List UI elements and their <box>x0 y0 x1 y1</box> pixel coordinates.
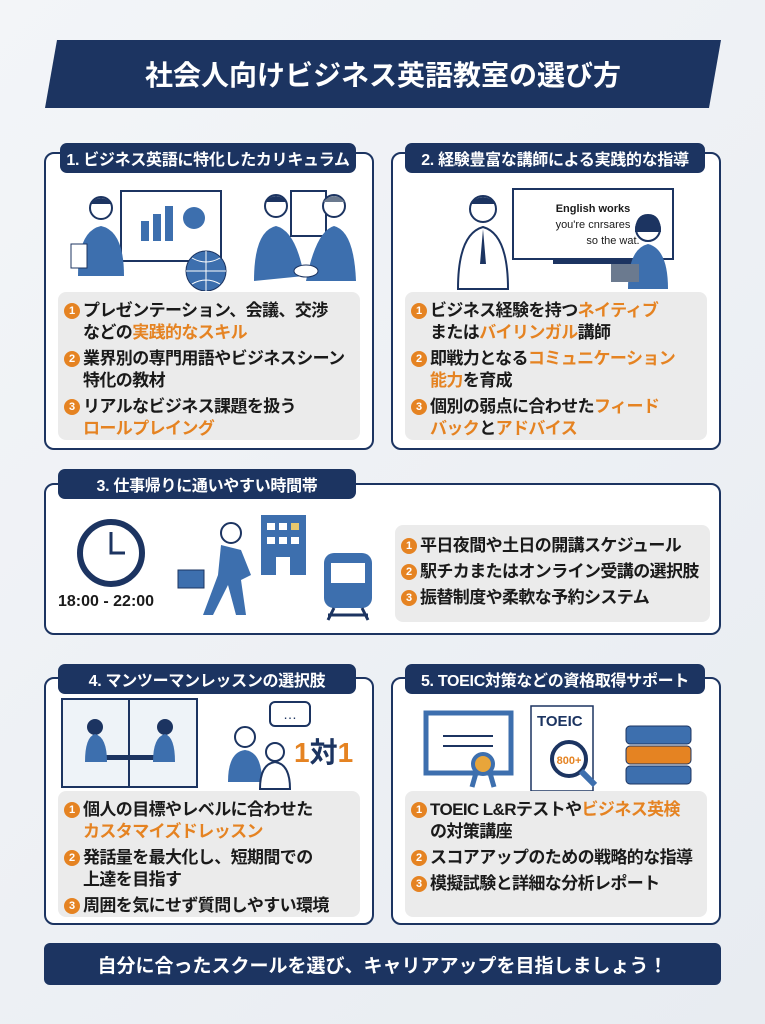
panel 1 list: 業界別の専門用語やビジネスシーン <box>83 349 345 368</box>
panel 4 list <box>58 791 360 917</box>
panel 2 <box>391 152 721 450</box>
panel 3 list: 1 <box>406 540 412 552</box>
panel 2 list: 3 <box>416 401 422 413</box>
panel 1 list: 1 <box>69 305 75 317</box>
panel 3 list: 駅チカまたはオンライン受講の選択肢 <box>420 562 699 581</box>
panel 5 illustrations <box>424 705 692 791</box>
panel 2 list: 即戦力となるコミュニケーション <box>430 349 675 368</box>
panel 3 list: 3 <box>406 592 412 604</box>
panel 2 list: 1 <box>416 305 422 317</box>
panel 2 illustrations: so the wat. <box>586 235 640 247</box>
tab 2: 2. 経験豊富な講師による実践的な指導 <box>421 152 689 169</box>
panel 4 list: 周囲を気にせず質問しやすい環境 <box>83 896 329 915</box>
tab 4: 4. マンツーマンレッスンの選択肢 <box>89 673 325 690</box>
tab 2 <box>405 143 705 173</box>
panel 1 illustrations <box>70 190 356 291</box>
panel 4 list: 発話量を最大化し、短期間での <box>83 848 313 867</box>
panel 4 <box>44 677 374 925</box>
panel 2 list: バックとアドバイス <box>430 419 577 438</box>
icon: runner, building, train <box>178 515 372 621</box>
footer banner: 自分に合ったスクールを選び、キャリアアップを目指しましょう！ <box>97 956 668 976</box>
panel 2 list: 個別の弱点に合わせたフィード <box>430 397 659 416</box>
panel 2 list: ビジネス経験を持つネイティブ <box>430 301 658 320</box>
tab 5 <box>405 664 705 694</box>
panel 4 list: 上達を目指す <box>83 870 181 889</box>
tab 1: 1. ビジネス英語に特化したカリキュラム <box>66 152 350 169</box>
panel 1 list: などの実践的なスキル <box>83 323 247 342</box>
icon: clock <box>77 519 145 587</box>
panel 5 list: の対策講座 <box>430 822 512 841</box>
panel 5 list <box>405 791 707 917</box>
time label: 18:00 - 22:00 <box>58 593 154 610</box>
tab 5: 5. TOEIC対策などの資格取得サポート <box>421 673 689 690</box>
panel 5 list: スコアアップのための戦略的な指導 <box>430 848 692 867</box>
title banner: 社会人向けビジネス英語教室の選び方 <box>145 60 621 91</box>
panel 4 list: 2 <box>69 852 75 864</box>
panel 5 list: 3 <box>416 878 422 890</box>
panel 4 list: カスタマイズドレッスン <box>83 822 263 841</box>
panel 1 list: ロールプレイング <box>83 419 214 438</box>
panel 5 list: 2 <box>416 852 422 864</box>
footer banner <box>44 943 721 985</box>
label: 1対1: 1対1 <box>294 737 353 768</box>
panel 5 illustrations: TOEIC <box>537 713 583 730</box>
panel 2 list <box>405 292 707 440</box>
panel 5 illustrations: 800+ <box>557 755 581 767</box>
panel 1 list <box>58 292 360 440</box>
tab 4 <box>58 664 356 694</box>
panel 1 list: リアルなビジネス課題を扱う <box>83 397 296 416</box>
panel 3 list: 振替制度や柔軟な予約システム <box>420 588 649 607</box>
panel 5 list: 模擬試験と詳細な分析レポート <box>430 874 660 893</box>
panel 2 list: 2 <box>416 353 422 365</box>
panel 1 list: 特化の教材 <box>83 371 165 390</box>
panel 1 list: 2 <box>69 353 75 365</box>
tab 1 <box>60 143 356 173</box>
panel 2 list: 能力を育成 <box>430 371 512 390</box>
tab 3: 3. 仕事帰りに通いやすい時間帯 <box>96 478 318 495</box>
panel 3 list: 2 <box>406 566 412 578</box>
panel 4 list: 1 <box>69 804 75 816</box>
tab 3 <box>58 469 356 499</box>
panel 5 list: 1 <box>416 804 422 816</box>
panel 1 list: プレゼンテーション、会議、交渉 <box>83 301 328 320</box>
panel 2 illustrations: you're cnrsares <box>556 219 631 231</box>
panel 5 <box>391 677 721 925</box>
panel 4 illustrations: … <box>283 706 297 722</box>
panel 3 list <box>395 525 710 622</box>
panel 2 illustrations <box>457 188 674 290</box>
panel 2 list: またはバイリンガル講師 <box>430 323 610 342</box>
panel 5 list: TOEIC L&Rテストやビジネス英検 <box>430 800 680 819</box>
panel 4 list: 3 <box>69 900 75 912</box>
title banner <box>45 40 721 108</box>
panel 2 illustrations: English works <box>556 203 630 215</box>
panel 3 list: 平日夜間や土日の開講スケジュール <box>420 536 681 555</box>
panel 3 <box>44 483 721 635</box>
panel 4 illustrations <box>61 698 311 790</box>
panel 4 list: 個人の目標やレベルに合わせた <box>83 800 313 819</box>
panel 1 <box>44 152 374 450</box>
panel 1 list: 3 <box>69 401 75 413</box>
